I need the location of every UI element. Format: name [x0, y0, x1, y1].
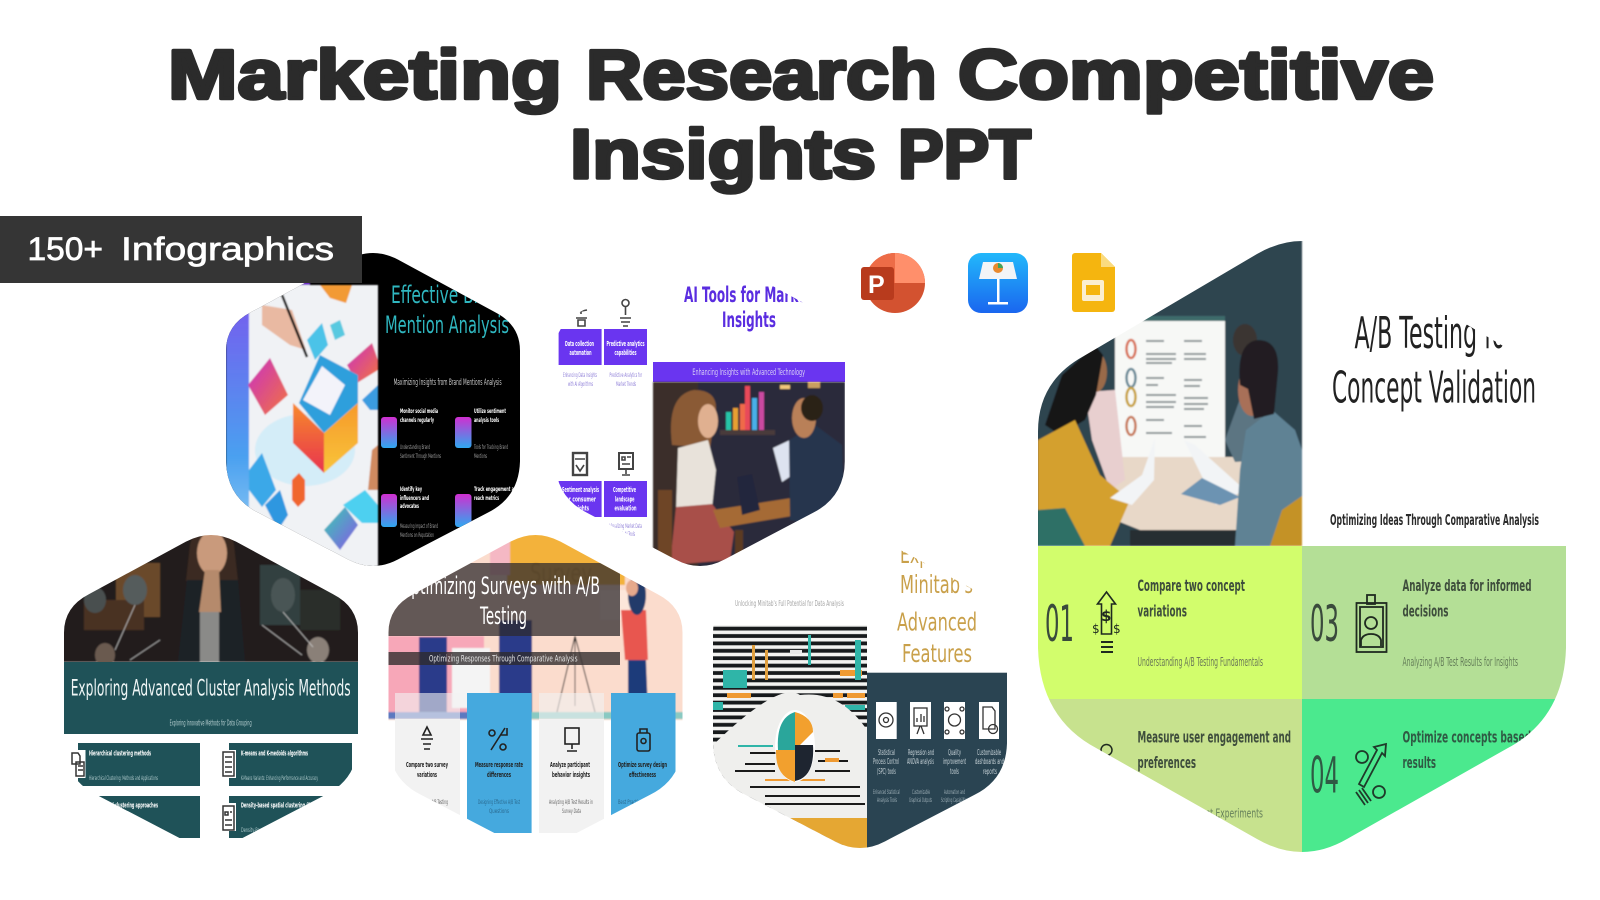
- slide title: Advanced: [897, 608, 977, 637]
- photo: two colleagues at a table: [653, 382, 845, 572]
- item headings: Monitor social media: [400, 407, 438, 415]
- illustration: isometric box and cards: [226, 270, 378, 570]
- illustration: striped data chart with pie: [713, 625, 867, 850]
- badge: 150+ Infographics: 150+: [28, 231, 103, 267]
- tile 02: preferences: [1138, 753, 1196, 772]
- slide title: AI Tools for Market: [684, 283, 812, 307]
- feature card labels: automation: [570, 349, 592, 357]
- panel: AI tools for market insights slide: Predictive Analytics for: [610, 372, 642, 379]
- icon: PowerPoint: [861, 253, 925, 313]
- dark features panel: ANOVA analysis: [907, 757, 934, 766]
- dark features panel: improvement: [943, 757, 966, 766]
- survey cards: Questions: [489, 808, 509, 815]
- dark subtitle overlay: Optimizing Responses Through Comparative Analysis: [429, 655, 578, 665]
- slide title: [385, 281, 509, 339]
- tile 04: [1302, 699, 1555, 852]
- dark features panel: Customizable: [912, 789, 930, 796]
- icon: Google Slides: [1072, 253, 1115, 312]
- slide title: [1332, 308, 1536, 414]
- panel: advanced cluster analysis slide: [60, 530, 365, 850]
- feature icons: [573, 300, 633, 475]
- item descriptions: Mentions: [474, 453, 487, 460]
- survey cards: [395, 693, 676, 833]
- feature card captions: with AI Algorithms: [568, 381, 593, 388]
- slide title: Effective Brand: [391, 281, 509, 309]
- feature card labels: evaluation: [614, 505, 637, 513]
- method cards: K-means and K-medoids algorithms: [241, 750, 308, 758]
- survey cards: Survey Data: [562, 808, 581, 815]
- item descriptions: Sentiment Through Mentions: [400, 453, 441, 460]
- tile 02: [1049, 699, 1302, 852]
- badge: 150+ Infographics: Infographics: [121, 231, 334, 267]
- method cards: Hierarchical clustering methods: [89, 750, 151, 758]
- item headings: reach metrics: [474, 494, 499, 502]
- purple subtitle banner: Enhancing Insights with Advanced Technology: [692, 368, 805, 378]
- title: Marketing: [168, 36, 562, 114]
- feature card labels: [562, 340, 644, 513]
- feature card labels: Competitive: [613, 486, 636, 494]
- dark features panel: Automation and: [944, 789, 965, 796]
- tile 01: $: [1092, 622, 1100, 636]
- panel: brand mention analysis slide: Maximizing Insights from Brand Mentions Analysis: [394, 378, 502, 388]
- method cards: Density-based spatial clustering (DBSCAN): [241, 802, 326, 810]
- dark features panel: Customizable: [977, 748, 1001, 757]
- slide title: Insights: [722, 308, 776, 332]
- tile 03: [1302, 546, 1574, 699]
- item headings: channels regularly: [400, 416, 434, 424]
- feature card captions: Market Trends: [616, 381, 636, 388]
- slide title: Minitab's: [900, 570, 973, 599]
- dark features panel: (SPC) tools: [877, 767, 896, 776]
- method cards: [72, 743, 352, 838]
- teal title band: [60, 662, 365, 734]
- item descriptions: [400, 444, 508, 539]
- dark features panel: reports: [983, 767, 997, 776]
- feature card captions: Enhancing Data Insights: [563, 372, 597, 379]
- survey cards: effectiveness: [629, 771, 656, 779]
- teal title band: Exploring Innovative Methods for Data Grouping: [170, 719, 252, 728]
- tile 02: Conducting A/B Test Experiments: [1138, 807, 1263, 821]
- feature card labels: landscape: [615, 496, 635, 504]
- slide title: [897, 550, 976, 662]
- title: Competitive: [958, 36, 1434, 114]
- dark title overlay: [384, 563, 620, 636]
- icon: Keynote: [968, 253, 1028, 313]
- survey cards: differences: [487, 771, 511, 779]
- item headings: Identify key: [400, 485, 422, 493]
- teal title band: Exploring Advanced Cluster Analysis Methods: [71, 677, 351, 702]
- panel: brand mention analysis slide: [220, 250, 525, 570]
- feature card labels: for consumer: [564, 496, 596, 504]
- slide title: Mention Analysis: [385, 311, 509, 339]
- item descriptions: Understanding Brand: [400, 444, 430, 451]
- method cards: K-Means Variants: Enhancing Performance and Accuracy: [241, 775, 318, 782]
- illustration: survey presentation: Survey: [530, 559, 592, 589]
- panel: AI tools for market insights slide: Predictive analytics: [606, 340, 644, 348]
- panel: Minitab advanced features slide: [713, 550, 1007, 848]
- feature card labels: capabilities: [614, 349, 636, 357]
- dark features panel: Process Control: [873, 757, 899, 766]
- panel: A/B testing for concept validation slide: [1030, 235, 1575, 860]
- tile 01: Understanding A/B Testing Fundamentals: [1138, 655, 1263, 669]
- tile 04: results: [1402, 753, 1436, 772]
- dark features panel: Analysis Tools: [877, 797, 897, 804]
- item headings: Utilize sentiment: [474, 407, 506, 415]
- illustration: survey presentation: [384, 530, 689, 720]
- badge: 150+ Infographics: [0, 216, 362, 283]
- item icons: [381, 417, 472, 527]
- panel: AI tools for market insights slide: [558, 286, 845, 566]
- dark features panel: dashboards and: [975, 757, 1004, 766]
- item headings: advocates: [400, 502, 419, 510]
- method cards: Model-based clustering approaches: [89, 802, 158, 810]
- tile 03: decisions: [1402, 602, 1448, 621]
- survey cards: Analyzing A/B Test Results in: [549, 799, 593, 806]
- panel: optimizing surveys slide: [388, 535, 682, 833]
- tile 01: 01: [1045, 595, 1074, 653]
- photo: woman with network nodes: [64, 535, 358, 662]
- title: Insights: [570, 115, 876, 193]
- dark features panel: tools: [950, 767, 959, 776]
- slide title: [684, 286, 802, 332]
- tile 01: $: [1101, 607, 1111, 625]
- feature card labels: Data collection: [565, 340, 594, 348]
- slide title: Exploring: [900, 540, 974, 569]
- photo: team meeting at whiteboard: [1030, 235, 1302, 546]
- survey cards: variations: [417, 771, 437, 779]
- survey cards: Designing Effective A/B Test: [478, 799, 520, 806]
- feature cards: [559, 329, 647, 517]
- dark subtitle overlay: [384, 652, 620, 665]
- dark features panel: Enhanced Statistical: [873, 789, 900, 796]
- feature card captions: [563, 372, 642, 538]
- dark features panel: Regression and: [908, 748, 934, 757]
- tile 01: Compare two concept: [1138, 576, 1245, 595]
- survey cards: Understanding A/B Testing: [408, 799, 448, 806]
- tile 02: 02: [1045, 747, 1074, 805]
- dark features panel: Scripting Capabilities: [941, 797, 968, 804]
- survey cards: Optimize survey design: [618, 761, 667, 769]
- panel: brand mention analysis slide: Tools for Tracking Brand: [474, 444, 508, 451]
- panel: AI tools for market insights slide: Visualizing Market Data: [610, 523, 642, 530]
- title: Research: [586, 36, 937, 114]
- survey cards: behavior insights: [552, 771, 590, 779]
- survey cards: Best Practices for A/B: [618, 799, 658, 806]
- feature card labels: insights: [571, 505, 589, 513]
- purple subtitle banner: [653, 362, 845, 382]
- tile 01: variations: [1138, 602, 1187, 621]
- dark features panel: Quality: [948, 748, 961, 757]
- item headings: analysis tools: [474, 416, 499, 424]
- dark features panel: Statistical: [878, 748, 895, 757]
- item descriptions: Measuring Impact of Brand: [400, 523, 438, 530]
- item descriptions: Mentions on Reputation: [400, 532, 434, 539]
- icon: PowerPoint: P: [868, 271, 885, 299]
- method cards: Hierarchical Clustering: Methods and Applications: [89, 775, 158, 782]
- item headings: Track engagement and: [474, 485, 519, 493]
- survey cards: Compare two survey: [406, 761, 448, 769]
- tile 01: [1030, 546, 1302, 699]
- dark title overlay: Testing: [479, 602, 527, 630]
- item headings: influencers and: [400, 494, 429, 502]
- tile 02: Measure user engagement and: [1138, 728, 1291, 747]
- slide title: Features: [902, 639, 972, 668]
- dark features panel: [867, 673, 1012, 853]
- tile 01: $: [1113, 622, 1121, 636]
- tile 04: 04: [1310, 747, 1339, 805]
- dark title overlay: Optimizing Surveys with A/B: [400, 572, 600, 600]
- survey cards: Analyze participant: [550, 761, 590, 769]
- title: [168, 36, 1434, 193]
- item headings: [400, 407, 519, 510]
- method cards: Density-Based Clustering Methods: [241, 827, 301, 834]
- survey cards: Measure response rate: [475, 761, 523, 769]
- title: PPT: [898, 115, 1031, 193]
- tile 03: 03: [1310, 595, 1339, 653]
- feature card captions: with AI Tools: [618, 531, 635, 538]
- slide subtitle: Unlocking Minitab's Full Potential for Data Analysis: [735, 599, 844, 608]
- feature card labels: Sentiment analysis: [562, 486, 599, 494]
- dark features panel: Graphical Outputs: [909, 797, 932, 804]
